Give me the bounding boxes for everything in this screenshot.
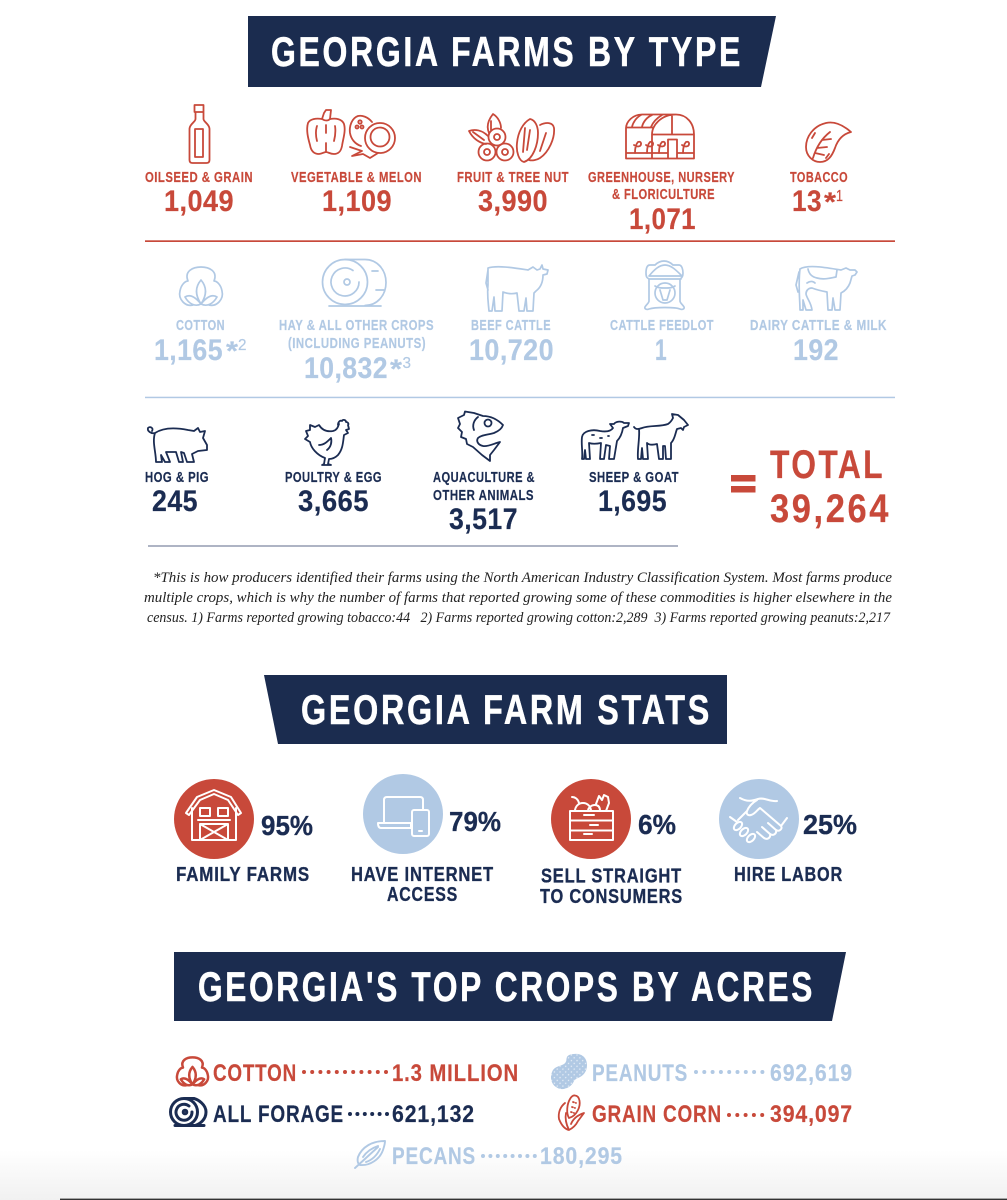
item: beef cattle: 10,720	[469, 334, 554, 367]
item: oilseed and grain	[145, 105, 253, 218]
item: hay and other crops: HAY & ALL OTHER CROPS	[279, 318, 434, 334]
icon: pecan	[355, 1141, 385, 1168]
item: hay and other crops: (INCLUDING PEANUTS)	[288, 336, 426, 352]
item: greenhouse, nursery and floriculture: & FLORICULTURE	[612, 187, 715, 203]
item: beef cattle: BEEF CATTLE	[471, 318, 551, 334]
number: 10,832 with footnote: 3	[402, 355, 411, 372]
crop: pecans	[355, 1141, 623, 1170]
heading: Georgia farm stats: GEORGIA FARM STATS	[301, 686, 712, 733]
heading: Georgia's top crops by acres: GEORGIA'S TOP CROPS BY ACRES	[198, 963, 815, 1010]
heading: Georgia farms by type: GEORGIA FARMS BY TYPE	[271, 28, 743, 75]
footnote text: *This is how producers identified their farms using the North American Industry Classification System. Most farms produce	[153, 570, 893, 586]
item: beef cattle	[469, 265, 554, 367]
footnote text: multiple crops, which is why the number of farms that reported growing some of these commodities is higher elsewhere in the	[144, 590, 893, 606]
heading: Georgia farm stats	[264, 675, 727, 744]
stat: internet access: 79%	[449, 806, 501, 837]
crop: grain corn: GRAIN CORN	[592, 1101, 722, 1128]
heading: Georgia farms by type	[248, 16, 776, 87]
stat: internet access	[351, 774, 501, 906]
number: 10,832 with footnote: *	[390, 354, 403, 384]
item: aquaculture and other animals	[433, 412, 535, 536]
item: hog and pig: 245	[152, 485, 198, 518]
item: greenhouse, nursery and floriculture: GREENHOUSE, NURSERY	[588, 170, 735, 186]
crop: peanuts	[551, 1054, 853, 1089]
footnote text: census. 1) Farms reported growing tobacco:44 2) Farms reported growing cotton:2,289 3) Farms reported growing peanuts:2,217	[147, 610, 891, 626]
item: dairy cattle and milk: 192	[793, 334, 839, 367]
footnote text	[144, 570, 893, 626]
icon: corn	[559, 1095, 584, 1130]
icon: tobacco leaf	[806, 122, 851, 162]
item: cattle feedlot	[610, 261, 714, 367]
item: hog and pig	[145, 427, 209, 518]
icon: feed bag	[645, 261, 684, 309]
number: 13 with footnote: 1	[836, 188, 843, 205]
icon: pig	[148, 427, 207, 462]
crop: peanuts: 692,619	[770, 1060, 853, 1087]
crop: all forage	[170, 1098, 475, 1128]
icon: barn	[186, 790, 241, 840]
crop: all forage: 621,132	[392, 1101, 475, 1128]
number: 13 with footnote: 13	[792, 185, 822, 218]
icon: hay bale	[322, 260, 386, 306]
item: poultry and egg: 3,665	[298, 485, 369, 518]
icon: produce crate	[570, 795, 613, 840]
item: oilseed and grain: OILSEED & GRAIN	[145, 170, 253, 186]
stat: hire labor: 25%	[803, 809, 857, 840]
panel: cotton, hay and cattle row	[154, 260, 887, 385]
heading: Georgia's top crops by acres	[174, 952, 846, 1021]
item: cotton: COTTON	[176, 318, 225, 334]
number: 13 with footnote: *	[824, 187, 837, 217]
panel: top crops list	[170, 1054, 853, 1170]
number: 1,165 with footnote: 2	[238, 337, 247, 354]
item: sheep and goat: SHEEP & GOAT	[589, 470, 679, 486]
panel: farm stats	[174, 774, 857, 908]
item: fruit and tree nut: 3,990	[478, 185, 548, 218]
item: greenhouse, nursery and floriculture	[588, 114, 735, 236]
icon: cotton	[177, 1057, 208, 1085]
number: 10,832 with footnote: 10,832	[304, 352, 388, 385]
crop: cotton	[177, 1057, 519, 1087]
icon: sheep and goat	[582, 414, 688, 459]
crop: peanuts: PEANUTS	[592, 1060, 688, 1087]
icon: hay bale	[170, 1098, 206, 1126]
crop: pecans: PECANS	[392, 1143, 476, 1170]
item: cattle feedlot: 1	[655, 334, 667, 367]
crop: grain corn: 394,097	[770, 1101, 853, 1128]
item: sheep and goat	[582, 414, 688, 518]
stat: direct sales: SELL STRAIGHT	[541, 864, 682, 888]
item: fruit and tree nut: FRUIT & TREE NUT	[457, 170, 569, 186]
icon: handshake	[730, 798, 787, 844]
stat: family farms	[174, 779, 313, 886]
number: 1,165 with footnote: *	[226, 336, 239, 366]
item: fruit and tree nut	[457, 114, 569, 218]
panel: livestock row	[145, 412, 688, 536]
icon: peanut	[551, 1054, 587, 1089]
item: vegetable and melon: VEGETABLE & MELON	[291, 170, 422, 186]
stat: direct sales: TO CONSUMERS	[540, 885, 683, 908]
icon: greenhouse	[626, 114, 694, 158]
item: cotton	[154, 267, 247, 367]
item: poultry and egg: POULTRY & EGG	[285, 470, 382, 486]
item: cattle feedlot: CATTLE FEEDLOT	[610, 318, 714, 334]
icon: pepper and coconut	[307, 110, 395, 158]
stat: direct sales	[540, 779, 683, 908]
item: sheep and goat: 1,695	[598, 485, 667, 518]
item: aquaculture and other animals: OTHER ANIMALS	[433, 488, 534, 504]
icon: dairy cow	[796, 267, 857, 310]
total callout	[731, 443, 891, 531]
item: aquaculture and other animals: AQUACULTURE &	[433, 470, 535, 486]
item: tobacco: TOBACCO	[790, 170, 848, 186]
number: 1,165 with footnote: 1,165	[154, 334, 223, 367]
total callout: 39,264	[770, 487, 891, 531]
stat: family farms: FAMILY FARMS	[176, 863, 310, 886]
item: vegetable and melon: 1,109	[322, 185, 392, 218]
stat: hire labor: HIRE LABOR	[734, 863, 843, 886]
item: dairy cattle and milk: DAIRY CATTLE & MILK	[750, 318, 887, 334]
icon: oil bottle	[190, 105, 210, 163]
stat: direct sales: 6%	[638, 809, 676, 840]
crop: cotton: COTTON	[213, 1060, 297, 1087]
item: aquaculture and other animals: 3,517	[449, 503, 518, 536]
item: dairy cattle and milk	[750, 267, 887, 367]
item: oilseed and grain: 1,049	[164, 185, 234, 218]
stat: internet access: ACCESS	[387, 883, 458, 906]
crop: all forage: ALL FORAGE	[213, 1101, 344, 1128]
item: hay and other crops	[279, 260, 434, 385]
crop: cotton: 1.3 MILLION	[392, 1060, 519, 1087]
item: tobacco	[790, 122, 851, 218]
stat: family farms: 95%	[261, 810, 313, 841]
icon: berries and pecans	[469, 114, 554, 162]
item: hog and pig: HOG & PIG	[145, 470, 209, 486]
icon: laptop and phone	[378, 797, 429, 836]
crop: grain corn	[559, 1095, 853, 1130]
icon: fish	[458, 412, 503, 461]
crop: pecans: 180,295	[540, 1143, 623, 1170]
icon: beef cow	[486, 265, 548, 311]
total callout: TOTAL	[770, 443, 885, 487]
item: poultry and egg	[285, 420, 382, 518]
stat: internet access: HAVE INTERNET	[351, 863, 494, 886]
icon: chicken	[305, 420, 349, 465]
item: vegetable and melon	[291, 110, 422, 218]
icon: cotton boll	[180, 267, 222, 305]
item: greenhouse, nursery and floriculture: 1,071	[629, 203, 696, 236]
stat: hire labor	[719, 779, 857, 886]
number: 13 with footnote	[792, 185, 843, 218]
panel: crop farm types row	[145, 105, 851, 236]
